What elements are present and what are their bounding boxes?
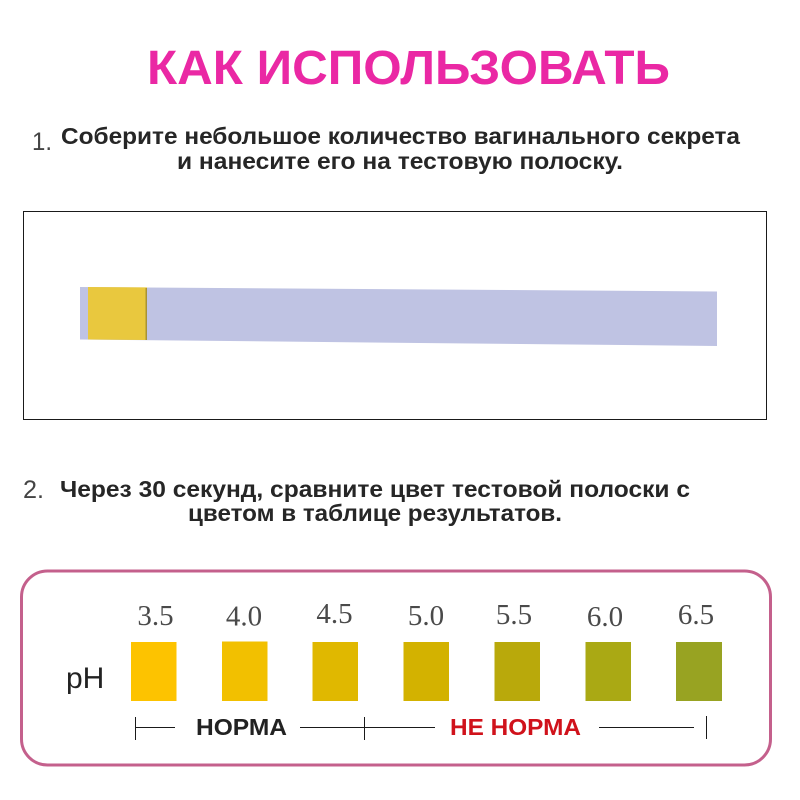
range brackets <box>136 716 706 740</box>
step 2 instruction: Через 30 секунд, сравните цвет тестовой полоски с <box>60 476 690 502</box>
pH scale values: 5.0 <box>408 600 444 632</box>
panel: test strip frame <box>24 212 766 420</box>
pH scale values: 3.5 <box>137 600 174 632</box>
step 1 number: 1. <box>32 128 52 156</box>
pH axis label: pH <box>66 662 104 695</box>
pH scale values <box>137 598 714 633</box>
step 1 instruction: и нанесите его на тестовую полоску. <box>177 148 623 174</box>
pH scale values: 6.5 <box>678 599 714 631</box>
pH scale values: 4.5 <box>316 598 353 630</box>
normal range label: НОРМА <box>196 714 287 740</box>
pH scale values: 6.0 <box>587 601 623 633</box>
step 2 instruction <box>60 476 690 526</box>
title: КАК ИСПОЛЬЗОВАТЬ <box>147 42 670 95</box>
pH scale values: 5.5 <box>496 599 532 631</box>
step 2 number: 2. <box>23 476 44 504</box>
colour swatches <box>131 642 722 701</box>
test strip <box>80 287 717 346</box>
step 1 instruction: Соберите небольшое количество вагинального секрета <box>61 123 741 149</box>
panel: pH colour chart <box>22 571 770 765</box>
abnormal range label: НЕ НОРМА <box>450 714 581 740</box>
pH scale values: 4.0 <box>226 600 262 632</box>
step 2 instruction: цветом в таблице результатов. <box>188 500 562 526</box>
strip reagent pad <box>88 287 147 340</box>
step 1 instruction <box>61 123 741 174</box>
